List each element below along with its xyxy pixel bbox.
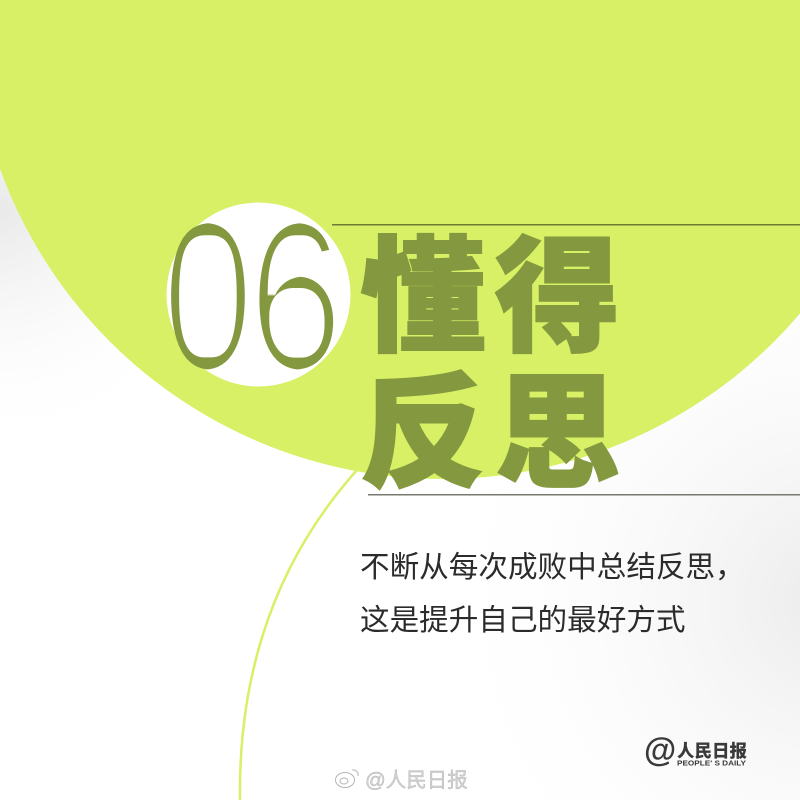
body text <box>360 551 745 637</box>
title: 懂得反思: 懂 <box>360 229 485 368</box>
logo: People's Daily <box>644 731 747 768</box>
body text: 这是提升自己的最好方式 <box>360 604 686 637</box>
thin green arc <box>240 470 357 800</box>
number 06 <box>161 179 344 415</box>
body text: 不断从每次成败中总结反思， <box>360 551 745 584</box>
number 06: 0 <box>161 179 255 414</box>
logo: People's Daily: @ <box>644 731 676 768</box>
white circle behind number <box>166 202 350 386</box>
title: 懂得反思: 思 <box>495 365 620 504</box>
logo: People's Daily: 人民日报 <box>677 741 747 761</box>
large green circle <box>0 0 800 479</box>
bottom rule <box>368 494 800 496</box>
title: 懂得反思: 得 <box>495 229 620 368</box>
top rule <box>332 224 800 226</box>
title: 懂得反思 <box>360 229 620 504</box>
watermark: Weibo handle: @人民日报 <box>365 769 468 792</box>
logo: People's Daily: PEOPLE' S DAILY <box>677 760 746 768</box>
title: 懂得反思: 反 <box>360 365 485 504</box>
number 06: 6 <box>247 179 344 415</box>
